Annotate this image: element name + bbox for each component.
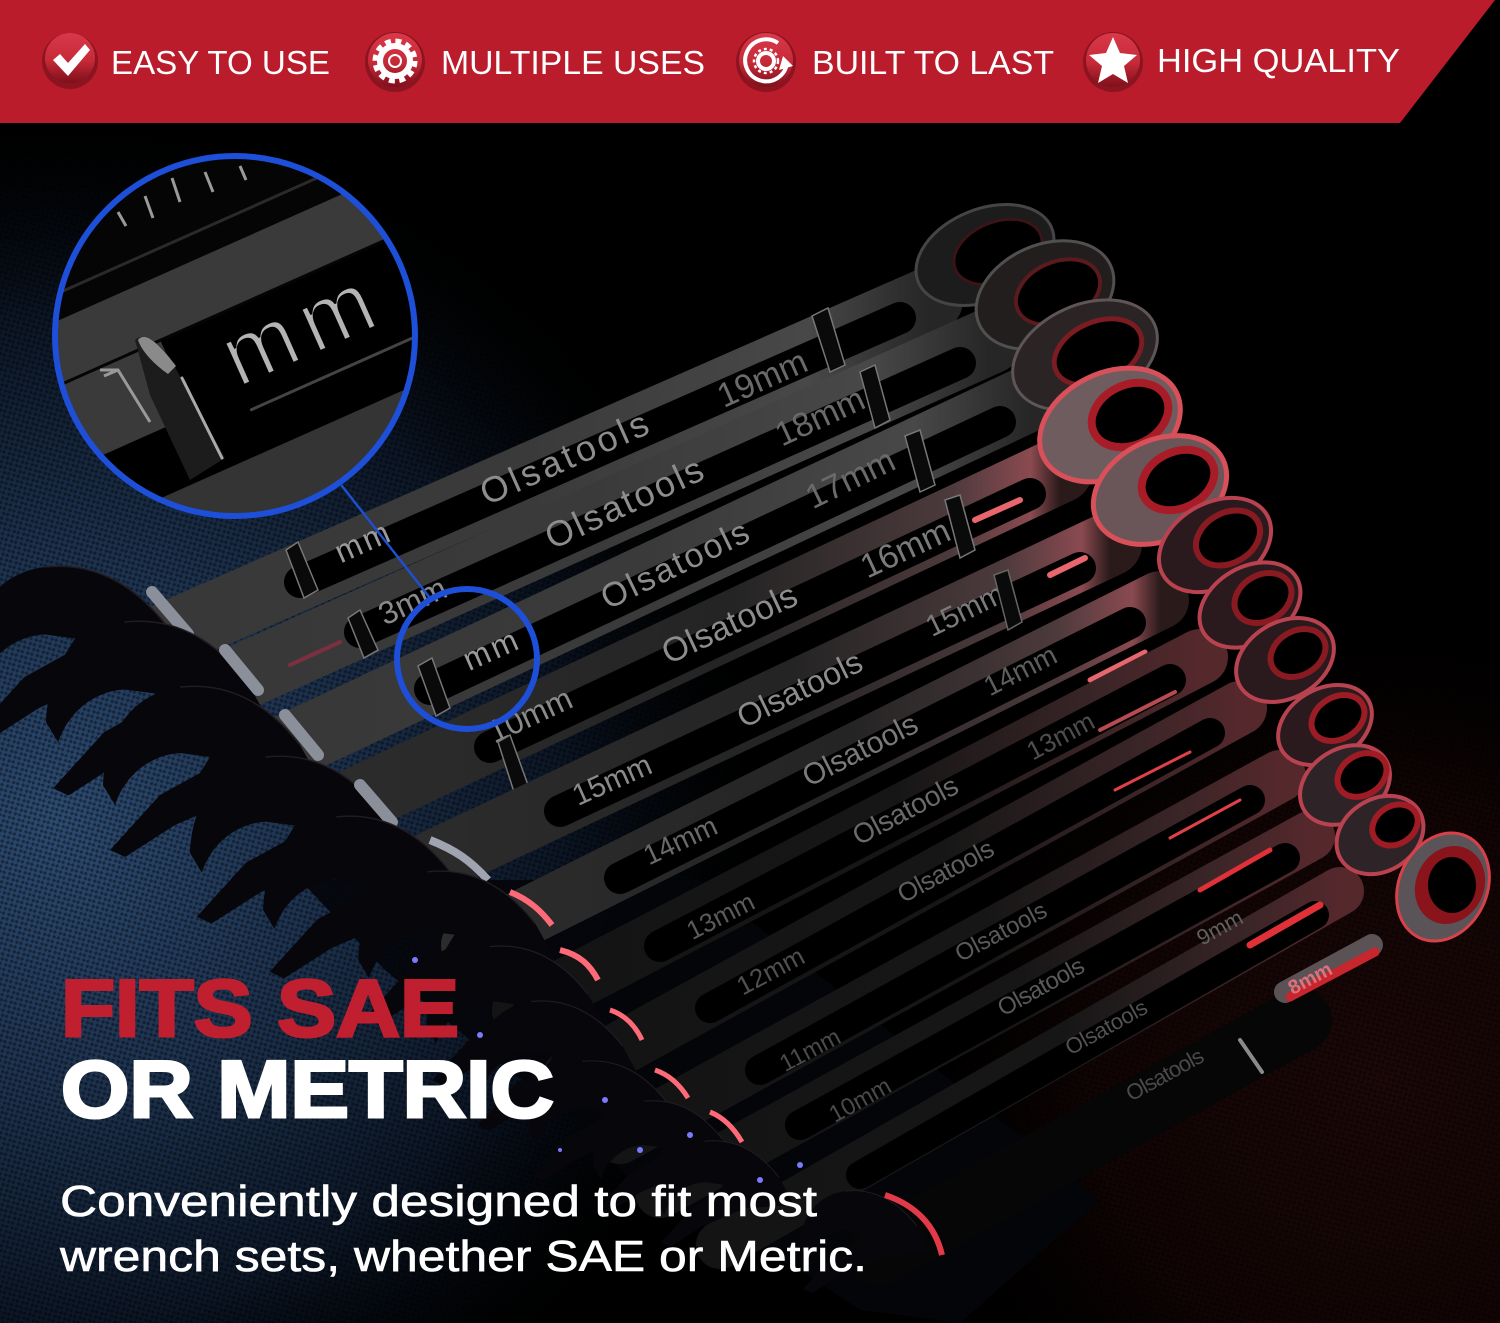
blue and pink rim-light glints on the wrench heads — [412, 957, 803, 1183]
label: high quality: HIGH QUALITY — [1157, 42, 1400, 79]
wrench 13mm: 13mm — [681, 886, 759, 946]
description text: Conveniently designed to fit most — [60, 1177, 817, 1226]
label: easy to use: EASY TO USE — [111, 44, 330, 81]
icon: durability cycle — [736, 32, 796, 92]
heading: FITS SAE — [61, 964, 459, 1054]
red benefits banner — [0, 0, 1495, 123]
wrench 11mm: Olsatools — [951, 897, 1052, 968]
wrench 15mm: 15mm — [567, 748, 657, 812]
wrench 16mm: Olsatools — [656, 576, 803, 672]
wrench 18mm: 18mm — [769, 380, 871, 454]
wrench 19mm: Olsatools — [473, 402, 655, 513]
wrench 15mm — [263, 414, 1245, 978]
wrench 18mm — [46, 220, 1131, 795]
wrench 13mm — [426, 545, 1316, 1086]
wrench 15mm: 15mm — [921, 577, 1010, 644]
wrench 13mm: 13mm — [1022, 706, 1099, 766]
wrench 11mm — [529, 669, 1386, 1180]
wrench 12mm: Olsatools — [892, 833, 999, 909]
wrench 14mm: Olsatools — [797, 707, 923, 794]
wrench 12mm — [472, 601, 1349, 1131]
shadow mass under the lower wrench heads — [300, 880, 1100, 1323]
icon: gear — [365, 32, 425, 92]
wrench 10mm: Olsatools — [993, 952, 1089, 1022]
wrench 14mm: 14mm — [638, 810, 722, 871]
wrench 19mm: mm — [329, 513, 398, 570]
icon: check mark — [42, 33, 98, 89]
wrench 17mm: 17mm — [800, 441, 901, 517]
small detail circle on wrench — [397, 589, 537, 729]
wrench 10mm: 10mm — [825, 1072, 896, 1128]
wrench 8mm: Olsatools — [1122, 1043, 1208, 1106]
wrench 17mm — [103, 278, 1175, 857]
label: multiple uses: MULTIPLE USES — [441, 44, 705, 81]
wrench 18mm: Olsatools — [538, 448, 710, 557]
description text: wrench sets, whether SAE or Metric. — [59, 1232, 867, 1281]
magnified close-up of mm marking — [52, 153, 418, 519]
wrench 10mm — [593, 729, 1405, 1214]
wrench 17mm: Olsatools — [595, 513, 755, 617]
wrench 12mm: 12mm — [732, 941, 809, 1001]
wrench 17mm: mm — [457, 621, 526, 678]
wrench 13mm: Olsatools — [847, 770, 963, 851]
wrench 18mm: 3mm — [373, 570, 452, 632]
wrench 9mm: 9mm — [1192, 905, 1247, 950]
connector line between lens and detail circle — [342, 486, 430, 598]
wrench 19mm — [0, 185, 1069, 740]
wrench 14mm: 14mm — [979, 639, 1062, 702]
wrench 16mm: 10mm — [482, 680, 578, 750]
wrench 8mm — [799, 818, 1500, 1293]
wrench 19mm: 19mm — [712, 342, 813, 415]
wrench 16mm — [190, 346, 1199, 924]
icon: star — [1083, 32, 1143, 92]
heading: OR METRIC — [61, 1045, 554, 1135]
label: built to last: BUILT TO LAST — [812, 44, 1054, 81]
wrench 14mm — [358, 479, 1288, 1025]
wrench 9mm: Olsatools — [1061, 994, 1152, 1060]
wrench 16mm: 16mm — [855, 512, 956, 586]
wrench 11mm: 11mm — [775, 1023, 845, 1078]
wrench 8mm: 8mm — [1285, 958, 1336, 1000]
magnified close-up of mm marking: mm — [206, 247, 398, 405]
heading — [61, 964, 554, 1135]
description text — [59, 1177, 867, 1281]
wrench 9mm — [657, 780, 1438, 1247]
wrench 15mm: Olsatools — [731, 643, 868, 735]
